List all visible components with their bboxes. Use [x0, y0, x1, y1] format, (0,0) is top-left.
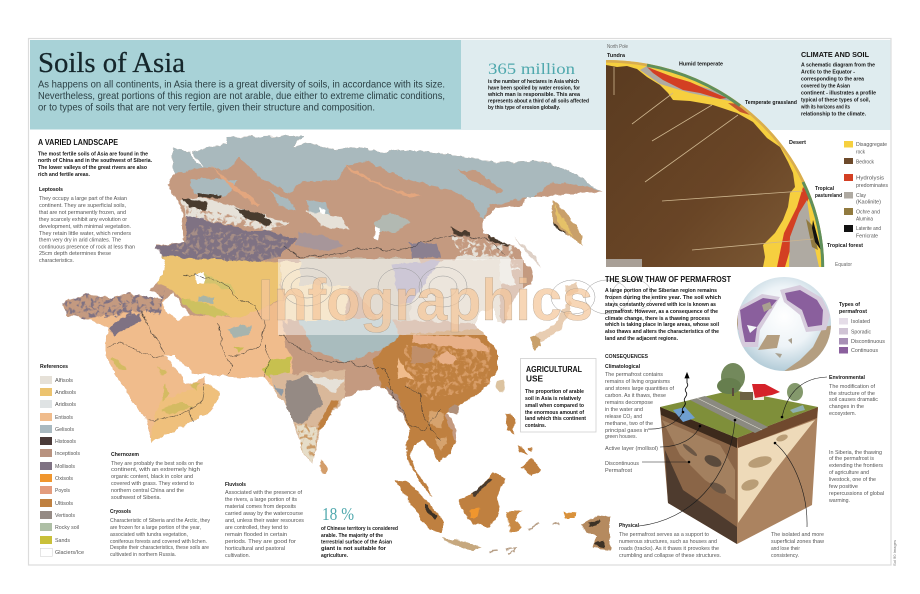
intro text [38, 78, 445, 114]
intro text: Nevertheless, great portions of this region are not arable, due either to extreme climatic conditions, [38, 90, 445, 102]
text block: fluvisols [225, 482, 304, 559]
legend: types of permafrost: Types of [839, 302, 860, 308]
text block: thawing in Siberia: of agriculture and [829, 470, 869, 476]
legend: references: Gelisols [55, 427, 74, 433]
statistic: 18 percent: of Chinese territory is considered [321, 526, 398, 532]
leptosols text: that are not permanently frozen, and [39, 210, 126, 216]
text block: slow thaw of permafrost: A large portion of the Siberian region remains [605, 288, 717, 294]
lead text: The most fertile soils of Asia are found in the [38, 152, 148, 158]
text block: thawing in Siberia [829, 450, 884, 504]
text block: isolated zones: and lose their [771, 546, 800, 552]
text block: cryosols: Despite their characteristics, these soils are [110, 545, 209, 551]
text block: thawing in Siberia: extending the frontiers [829, 463, 883, 469]
legend: soil horizons: rock [856, 150, 865, 156]
legend: references: Andisols [55, 390, 76, 396]
islands [319, 200, 610, 554]
trees [717, 363, 803, 401]
legend: types of permafrost: Continuous [851, 348, 878, 354]
cube top surface [660, 390, 818, 438]
watermark: Infographics [258, 268, 593, 333]
text block: consequences: in the water and [605, 407, 643, 413]
text block: consequences: Active layer (mollisol) [605, 446, 658, 452]
leptosols text: them very dry in arid climates. The [39, 238, 121, 244]
text block: consequences: methane, two of the [605, 421, 653, 427]
text block: consequences: The permafrost contains [605, 372, 663, 378]
text block: fluvisols: periods. They are good for [225, 539, 296, 545]
legend: soil horizons: Bedrock [856, 160, 874, 166]
legend: references: Sands [55, 538, 70, 544]
leptosols text: they scarcely exhibit any evolution or [39, 217, 127, 223]
text block: thawing in Siberia: livestock, one of the [829, 477, 876, 483]
text block: slow thaw of permafrost: permafrost. However, as a consequence of the [605, 309, 718, 315]
text block: environmental: ecosystem. [829, 411, 856, 417]
legend: soil horizons: Alumina [856, 216, 873, 222]
text block: cryosols: coniferous forests and covered with lichen. [110, 539, 207, 545]
climate zone labels [607, 44, 863, 268]
callout: agricultural use: The proportion of arable [525, 389, 584, 395]
text block: consequences: CONSEQUENCES [605, 354, 648, 360]
text block: climate and soil: continent - illustrates a profile [801, 90, 876, 96]
legend: references: Mollisols [55, 464, 75, 470]
climate zone labels: North Pole [607, 44, 628, 50]
text block: cryosols: are frozen for a large portion of the year, [110, 525, 201, 531]
map of Asia [50, 120, 610, 560]
inland seas [163, 292, 190, 320]
legend: soil horizons: Hydrolysis [856, 176, 884, 182]
cube left face [660, 407, 737, 544]
callout: agricultural use: USE [526, 374, 544, 384]
legend: references: Rocky soil [55, 525, 79, 531]
text block: climate and soil: covered by the Asian [801, 83, 850, 89]
legend: references: Inceptisols [55, 451, 80, 457]
text block: fluvisols: cultivation. [225, 553, 250, 559]
statistic: 365 million: 365 million [488, 61, 575, 78]
legend: references [40, 364, 84, 556]
leptosols text: development, with minimal vegetation. [39, 224, 131, 230]
leptosols text: Leptosols [39, 187, 63, 193]
house [740, 384, 780, 400]
statistic: 18 percent [321, 504, 398, 559]
climate zone labels: Desert [789, 140, 806, 146]
text block: climate and soil: with its horizons and its [800, 104, 850, 110]
legend: soil horizons: Ochre and [856, 210, 880, 216]
climate zone labels: Equator [835, 262, 852, 268]
text block: thawing in Siberia: In Siberia, the thawing [829, 450, 882, 456]
text block: thawing in Siberia: of the permafrost is [829, 456, 874, 462]
text block: physical [619, 523, 721, 559]
text block: isolated zones: superficial zones thaw [771, 539, 824, 545]
text block: fluvisols: carried away by the watercourse [225, 511, 303, 517]
legend: soil horizons: Laterite and [856, 226, 881, 232]
text block: climate and soil [800, 50, 876, 117]
text block: climate and soil: relationship to the climate. [801, 111, 867, 117]
leptosols text: They occupy a large part of the Asian [39, 196, 127, 202]
text block: physical: roads (tracks). As it thaws it provokes the [619, 546, 719, 552]
legend: references: Aridisols [55, 402, 76, 408]
legend: types of permafrost: Discontinuous [851, 339, 885, 345]
callout: agricultural use: soil in Asia is relatively [525, 396, 581, 402]
panel: 365 million and climate band [461, 40, 890, 130]
lead text: north of China and in the southwest of Siberia. [38, 158, 153, 164]
climate zone labels: Tundra [607, 53, 625, 59]
text block: slow thaw of permafrost: also thaws and alters the characteristics of the [605, 329, 719, 335]
statistic text: by this type of erosion globally. [488, 105, 560, 111]
text block: environmental [829, 375, 878, 417]
text block: isolated zones: consistency. [771, 553, 799, 559]
text block: environmental: changes in the [829, 404, 864, 410]
leptosols text: characteristics. [39, 258, 74, 264]
legend: soil horizons: predominates [856, 183, 888, 189]
text block: thawing in Siberia: few positive [829, 484, 858, 490]
callout: agricultural use: contains. [525, 423, 546, 429]
text block: fluvisols: Associated with the presence of [225, 490, 303, 496]
statistic text: have been spoiled by water erosion, for [488, 86, 580, 92]
text block: physical: Physical [619, 523, 639, 529]
text block: slow thaw of permafrost: THE SLOW THAW OF PERMAFROST [605, 275, 731, 284]
title: Soils of Asia [38, 48, 185, 79]
climate zone labels: Temperate grassland [745, 100, 797, 106]
callout: agricultural use: AGRICULTURAL [526, 365, 582, 374]
panel: a varied landscape [38, 138, 153, 264]
text block: chernozem: Chernozem [111, 452, 139, 458]
diagram: soil cube [639, 363, 827, 544]
mainland soils [62, 134, 602, 497]
text block: environmental: soil causes dramatic [829, 397, 878, 403]
leptosols text: 25cm depth determines these [39, 251, 111, 257]
text block: fluvisols: and, unless their water resources [225, 518, 304, 524]
statistic: 18 percent: agriculture. [321, 553, 348, 559]
legend: types of permafrost: Sporadic [851, 330, 871, 336]
statistic text: is the number of hectares in Asia which [488, 79, 579, 85]
text block: consequences: Permafrost [605, 468, 633, 474]
legend: types of permafrost [839, 302, 885, 354]
lead text: rich and fertile areas. [38, 172, 91, 178]
text block: consequences: carbon. As it thaws, these [605, 393, 666, 399]
legend: references: Poyols [55, 488, 70, 494]
text block: consequences: remains of living organisms [605, 379, 670, 385]
text block: consequences: release CO₂ and [605, 414, 642, 420]
text block: fluvisols: the rivers, a large portion of its [225, 497, 297, 503]
text block: fluvisols: are controlled, they tend to [225, 525, 288, 531]
lead text [38, 152, 153, 178]
legend: references: Vertisols [55, 513, 75, 519]
text block: slow thaw of permafrost: which is taking place in large areas, whose soil [604, 322, 720, 328]
text block: climate and soil: Arctic to the Equator - [801, 69, 855, 75]
text block: climate and soil: A schematic diagram from the [801, 63, 875, 69]
text block: fluvisols: remain flooded in certain [225, 532, 287, 538]
text block: consequences [605, 354, 675, 474]
text block: physical: crumbling and collapse of these structures. [619, 553, 721, 559]
text block: chernozem: covered with grass. They extend to [111, 481, 194, 487]
text block: thawing in Siberia: warming. [829, 498, 850, 504]
legend: references: Oxisols [55, 476, 73, 482]
heading: A VARIED LANDSCAPE [38, 138, 119, 147]
statistic: 18 percent: arable. The majority of the [321, 533, 383, 539]
statistic text: which man is responsible. This area [487, 92, 580, 98]
text block: slow thaw of permafrost: frozen during the entire year. The soil which [605, 295, 721, 301]
legend: types of permafrost: Isolated [851, 319, 870, 325]
callout: agricultural use [520, 358, 596, 432]
pond [790, 405, 805, 413]
legend: soil horizons: (Kaolinite) [856, 200, 881, 206]
text block: climate and soil: corresponding to the area [801, 77, 864, 83]
callout: agricultural use: small when compared to [525, 403, 585, 409]
text block: slow thaw of permafrost [604, 275, 731, 342]
callout: agricultural use: the enormous amount of [525, 410, 584, 416]
statistic text [487, 79, 589, 111]
legend: soil horizons [844, 141, 888, 240]
legend: references: Entisols [55, 415, 73, 421]
statistic: 18 percent: giant is not suitable for [321, 546, 386, 552]
intro text: or to types of soils that are not very fertile, given their structure and composition. [38, 102, 375, 114]
legend: references: Histosols [55, 439, 76, 445]
text block: climate and soil: CLIMATE AND SOIL [801, 50, 869, 59]
statistic: 18 percent: 18 % [322, 504, 354, 524]
panel: title header [30, 40, 461, 130]
water [673, 407, 695, 422]
text block: physical: numerous structures, such as houses and [619, 539, 717, 545]
text block: physical: The permafrost serves as a support to [619, 532, 709, 538]
text block: cryosols: Characteristic of Siberia and the Arctic, they [110, 518, 210, 524]
text block: consequences: and stores large quantities of [605, 386, 675, 392]
text block: slow thaw of permafrost: land and the adjacent regions. [605, 336, 679, 342]
text block: environmental: the structure of the [829, 391, 875, 397]
chart: climate and soil profile [606, 44, 863, 268]
leptosols text: continuous presence of rock at less than [39, 244, 135, 250]
legend: soil horizons: Ferricrate [856, 234, 878, 240]
climate zone labels: Humid temperate [679, 62, 723, 68]
text block: cryosols: Cryosols [110, 509, 131, 515]
statistic: 18 percent: terrestrial surface of the Asian [321, 540, 392, 546]
climate zone labels: Tropical [815, 186, 834, 192]
text block: chernozem: southwest of Siberia. [111, 495, 161, 501]
country borders [107, 235, 505, 440]
legend: references: Alfisols [55, 378, 73, 384]
legend: soil horizons: Disaggregate [856, 142, 887, 148]
statistic text: represents about a third of all soils affected [488, 98, 589, 104]
text block: consequences: remains decompose [605, 400, 653, 406]
climate zone labels: pastureland [815, 193, 842, 199]
text block: climate and soil: typical of these types of soil, [801, 97, 870, 103]
legend: references: References [40, 364, 68, 370]
text block: chernozem [111, 452, 203, 501]
text block: cryosols: associated with tundra vegetation, [110, 532, 188, 538]
text block: isolated zones [771, 532, 824, 559]
text block: consequences: principal gases in [605, 428, 648, 434]
legend: references: Glaciers/Ice [55, 550, 84, 556]
leader lines [639, 377, 827, 527]
text block: chernozem: continent, with an extremely high [111, 467, 200, 473]
callout: agricultural use: land which this continent [525, 416, 586, 422]
legend: soil horizons: Clay [856, 193, 866, 199]
text block: environmental: Environmental [829, 375, 866, 381]
leptosols text [39, 187, 135, 264]
text block: fluvisols: horticultural and pastoral [225, 546, 285, 552]
legend: references: Ultisols [55, 501, 73, 507]
arrow: gases rising [682, 373, 689, 412]
road [690, 396, 768, 433]
leptosols text: They retain little water, which renders [39, 231, 131, 237]
text block: consequences: Climatological [605, 364, 641, 370]
lead text: The lower valleys of the great rivers are also [38, 165, 148, 171]
intro text: As happens on all continents, in Asia there is a great diversity of soils, in accordance with its size. [38, 78, 445, 90]
text block: environmental: The modification of [829, 384, 876, 390]
text block: cryosols [110, 509, 210, 558]
leptosols text: continent. They are superficial soils, [39, 203, 126, 209]
image credit: Sol 90 Images [893, 540, 897, 566]
text block: chernozem: northern central China and the [111, 488, 184, 494]
text block: chernozem: organic content, black in color and [111, 474, 193, 480]
text block: fluvisols: Fluvisols [225, 482, 246, 488]
text block: consequences: green houses. [605, 434, 637, 440]
text block: chernozem: They are probably the best soils on the [111, 461, 203, 467]
text block: isolated zones: The isolated and more [771, 532, 824, 538]
text block: fluvisols: material comes from deposits [225, 504, 296, 510]
text block: thawing in Siberia: repercussions of global [829, 491, 884, 497]
text block: slow thaw of permafrost: stays constantly covered with ice is known as [605, 302, 716, 308]
globe: permafrost distribution [735, 277, 835, 375]
legend: types of permafrost: permafrost [839, 309, 867, 315]
text block: slow thaw of permafrost: climate change, there is a thawing process [605, 316, 710, 322]
text block: cryosols: cultivated in northern Russia. [110, 552, 176, 558]
climate zone labels: Tropical forest [827, 243, 863, 249]
cube right face [737, 407, 818, 544]
text block: consequences: Discontinuous [605, 461, 639, 467]
